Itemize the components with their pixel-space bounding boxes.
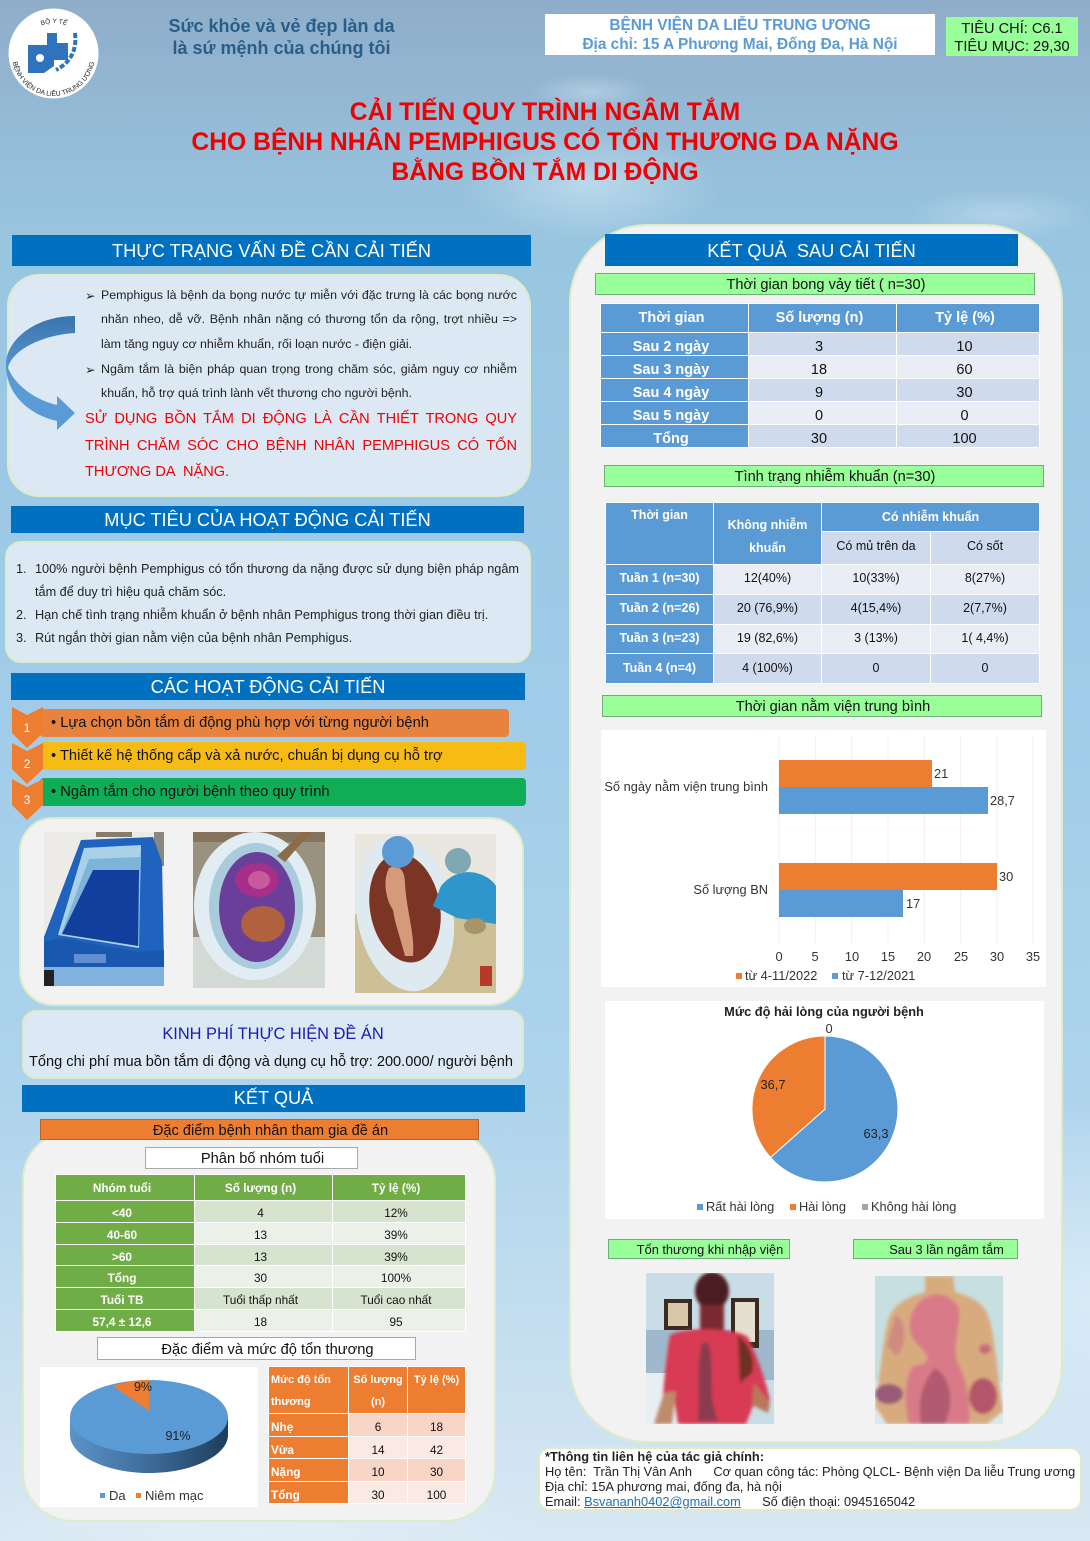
table: nhiễm khuẩn: 20 (76,9%)	[737, 601, 798, 615]
table: mức độ tổn thương: Tổng	[271, 1488, 300, 1502]
table: mức độ tổn thương: 100	[427, 1488, 446, 1502]
text: bullet points	[85, 288, 517, 400]
chart: satisfaction pie	[605, 1001, 1044, 1219]
step 3 bar: • Ngâm tắm cho người bệnh theo quy trình	[51, 784, 330, 800]
table: nhiễm khuẩn: Tuần 3 (n=23)	[620, 631, 700, 645]
table: nhiễm khuẩn: Tuần 1 (n=30)	[620, 571, 700, 585]
table: nhiễm khuẩn: 0	[873, 661, 879, 675]
table: nhóm tuổi: >60	[112, 1250, 132, 1264]
panel: mục tiêu	[5, 541, 531, 663]
table: nhiễm khuẩn: Tuần 4 (n=4)	[623, 661, 696, 675]
table: nhóm tuổi: <40	[112, 1206, 132, 1220]
callout: red conclusion: TRÌNH CHĂM SÓC CHO BỆNH NHÂN PEMPHIGUS CÓ TỔN	[85, 438, 517, 454]
step chevrons 1-3: 2	[24, 757, 31, 771]
table: mức độ tổn thương: 18	[430, 1420, 443, 1434]
table: mức độ tổn thương: Số lượng (n)	[353, 1374, 403, 1408]
table: nhóm tuổi: Tuổi cao nhất	[360, 1293, 432, 1307]
heading: mục tiêu: MỤC TIÊU CỦA HOẠT ĐỘNG CẢI TIẾN	[104, 510, 431, 530]
text: objectives list: 3.	[16, 631, 27, 645]
chart: hospital stay bars: từ 7-12/2021	[842, 968, 915, 983]
chart: hospital stay bars	[601, 730, 1046, 987]
chart: 3D pie lesion site: 9%	[134, 1380, 152, 1394]
table: bong vảy tiết: 0	[815, 408, 823, 424]
step chevrons 1-3	[12, 707, 43, 820]
table: bong vảy tiết: Thời gian	[639, 310, 704, 326]
text: bullet points: nhăn nheo, dễ vỡ. Bệnh nhân nặng có thương tổn da rộng, trợt nhiều =>	[101, 312, 517, 326]
step 2 bar	[40, 742, 526, 770]
step chevrons 1-3: 3	[24, 793, 31, 807]
photo: patient bathing with nurse	[355, 834, 496, 993]
chart: hospital stay bars: Số lượng BN	[693, 882, 768, 897]
subheading: thời gian nằm viện: Thời gian nằm viện trung bình	[736, 699, 930, 715]
slogan: là sứ mệnh của chúng tôi	[172, 38, 391, 58]
chart: 3D pie lesion site	[40, 1367, 258, 1507]
table: bong vảy tiết: Tỷ lệ (%)	[935, 310, 995, 326]
table: bong vảy tiết: Sau 3 ngày	[633, 362, 709, 378]
logo: Bệnh viện Da liễu Trung ương	[8, 8, 98, 98]
table: nhiễm khuẩn: 4 (100%)	[742, 661, 793, 675]
table: mức độ tổn thương: 42	[430, 1443, 443, 1457]
table: bong vảy tiết: 10	[956, 339, 973, 355]
table: nhiễm khuẩn: Có mủ trên da	[836, 538, 916, 552]
chart: hospital stay bars: 5	[811, 949, 819, 964]
chart: satisfaction pie: 36,7	[761, 1077, 785, 1092]
decorative: face mask circle	[382, 836, 414, 868]
table: nhóm tuổi: 13	[254, 1250, 267, 1264]
title: CẢI TIẾN QUY TRÌNH NGÂM TẮM	[350, 99, 740, 126]
heading: kinh phí: KINH PHÍ THỰC HIỆN ĐỀ ÁN	[162, 1025, 384, 1043]
chart: satisfaction pie: Không hài lòng	[871, 1199, 956, 1214]
hospital info box: Địa chỉ: 15 A Phương Mai, Đống Đa, Hà Nội	[582, 36, 898, 52]
table: bong vảy tiết: Sau 4 ngày	[633, 385, 709, 401]
heading: mục tiêu	[11, 506, 524, 533]
step 1 bar	[40, 709, 509, 737]
table: nhóm tuổi: 30	[254, 1271, 267, 1285]
heading: kết quả sau cải tiến	[605, 234, 1018, 266]
text: bullet points: ➢	[85, 289, 95, 303]
step 2 bar: • Thiết kế hệ thống cấp và xả nước, chuẩn bị dụng cụ hỗ trợ	[51, 748, 443, 764]
table: nhóm tuổi: Số lượng (n)	[225, 1180, 296, 1194]
table: nhiễm khuẩn: Thời gian	[631, 508, 688, 522]
table: bong vảy tiết: Số lượng (n)	[776, 310, 863, 326]
chart: hospital stay bars: 21	[934, 766, 948, 781]
table: nhiễm khuẩn	[605, 502, 1040, 684]
chart: 3D pie lesion site: 91%	[165, 1429, 191, 1443]
table: bong vảy tiết: 3	[815, 339, 823, 355]
table: nhiễm khuẩn: 10(33%)	[852, 571, 900, 585]
table: nhóm tuổi: 4	[257, 1206, 264, 1220]
subheading: đặc điểm bệnh nhân	[40, 1119, 479, 1140]
table: nhóm tuổi: 18	[254, 1315, 267, 1329]
panel: thực trạng	[7, 274, 531, 497]
table: mức độ tổn thương: Vừa	[271, 1443, 294, 1457]
callout: red conclusion: SỬ DỤNG BỒN TẮM DI ĐỘNG LÀ CẦN THIẾT TRONG QUY	[85, 411, 517, 427]
logo: Bệnh viện Da liễu Trung ương: BỆNH VIỆN DA LIỄU TRUNG ƯƠNG	[12, 62, 94, 96]
table: mức độ tổn thương: 10	[371, 1465, 385, 1479]
text: objectives list: 1.	[16, 562, 27, 576]
chart: hospital stay bars: 10	[845, 949, 859, 964]
table: nhóm tuổi: Tuổi thấp nhất	[223, 1293, 298, 1307]
callout: red conclusion: THƯƠNG DA NẶNG.	[85, 464, 229, 480]
table: bong vảy tiết: 100	[952, 431, 977, 447]
text: objectives list	[16, 562, 519, 645]
hospital info box	[545, 14, 935, 55]
text: objectives list: 100% người bệnh Pemphigus có tổn thương da nặng được sử dụng biện pháp ngâm	[35, 562, 519, 576]
table: bong vảy tiết: Tổng	[653, 431, 689, 447]
table: nhóm tuổi: 100%	[381, 1271, 411, 1285]
label: tổn thương khi nhập viện: Tổn thương khi nhập viện	[637, 1242, 783, 1256]
table: nhóm tuổi	[55, 1174, 466, 1332]
table: nhiễm khuẩn: Tuần 2 (n=26)	[620, 601, 700, 615]
panel: kinh phí	[22, 1010, 524, 1079]
subheading: phân bố nhóm tuổi	[145, 1147, 358, 1169]
table: nhóm tuổi: 39%	[384, 1250, 408, 1264]
title: BẰNG BỒN TẮM DI ĐỘNG	[391, 159, 699, 186]
table: mức độ tổn thương: Nhẹ	[271, 1420, 293, 1434]
chart: hospital stay bars: 35	[1026, 949, 1040, 964]
subheading: đặc điểm và mức độ tổn thương	[97, 1337, 416, 1360]
photo: inflatable blue tub	[44, 832, 164, 986]
subheading: tình trạng nhiễm khuẩn: Tình trạng nhiễm khuẩn (n=30)	[735, 469, 935, 485]
table: bong vảy tiết: 0	[960, 408, 969, 424]
table: nhóm tuổi: Tuổi TB	[100, 1293, 144, 1307]
table: bong vảy tiết: Sau 5 ngày	[633, 408, 709, 424]
table: bong vảy tiết: 9	[815, 385, 823, 401]
table: mức độ tổn thương: Mức độ tổn thương	[271, 1374, 331, 1408]
table: bong vảy tiết	[600, 303, 1040, 448]
table: nhóm tuổi: 13	[254, 1228, 267, 1242]
chart: satisfaction pie: Mức độ hải lòng của người bệnh	[724, 1004, 924, 1019]
chart: satisfaction pie: Hài lòng	[799, 1199, 846, 1214]
table: bong vảy tiết: 18	[811, 362, 827, 378]
photo: lesions after treatment	[875, 1276, 1003, 1424]
heading: thực trạng	[12, 235, 531, 266]
chart: hospital stay bars: Số ngày nằm viện trung bình	[604, 779, 768, 794]
table: mức độ tổn thương	[268, 1366, 466, 1504]
text: bullet points: Ngâm tắm là biện pháp quan trọng trong chăm sóc, giảm nguy cơ nhiễm	[101, 362, 517, 376]
chart: 3D pie lesion site: Da	[109, 1488, 126, 1503]
heading: kết quả sau cải tiến: KẾT QUẢ SAU CẢI TIẾN	[707, 240, 916, 260]
text: objectives list: Hạn chế tình trạng nhiễm khuẩn ở bệnh nhân Pemphigus trong thời gian điều trị.	[35, 608, 488, 622]
criteria box: TIÊU MỤC: 29,30	[954, 39, 1070, 55]
table: nhiễm khuẩn: 3 (13%)	[854, 631, 898, 645]
subheading: phân bố nhóm tuổi: Phân bố nhóm tuổi	[201, 1151, 324, 1167]
text: bullet points: ➢	[85, 363, 95, 377]
chart: hospital stay bars: 0	[775, 949, 783, 964]
subheading: tình trạng nhiễm khuẩn	[604, 465, 1044, 487]
criteria box: TIÊU CHÍ: C6.1	[961, 21, 1063, 37]
chart: satisfaction pie: 0	[825, 1021, 833, 1036]
table: mức độ tổn thương: 14	[371, 1443, 385, 1457]
text: objectives list: 2.	[16, 608, 27, 622]
table: nhóm tuổi: Nhóm tuổi	[93, 1180, 151, 1194]
step chevrons 1-3: 1	[24, 721, 31, 735]
subheading: đặc điểm và mức độ tổn thương: Đặc điểm và mức độ tổn thương	[161, 1342, 374, 1358]
table: nhiễm khuẩn: 1( 4,4%)	[961, 631, 1009, 645]
heading: các hoạt động: CÁC HOẠT ĐỘNG CẢI TIẾN	[151, 677, 385, 697]
slogan	[168, 16, 395, 58]
chart: hospital stay bars: 17	[906, 896, 920, 911]
chart: hospital stay bars: 30	[990, 949, 1004, 964]
chart: hospital stay bars: 20	[917, 949, 931, 964]
label: tổn thương khi nhập viện	[608, 1239, 790, 1259]
text: bullet points: làm tăng nguy cơ nhiễm khuẩn, rối loạn nước - điện giải.	[101, 337, 412, 351]
table: nhiễm khuẩn: 0	[982, 661, 988, 675]
table: nhóm tuổi: 39%	[384, 1228, 408, 1242]
table: nhiễm khuẩn: Có sốt	[967, 538, 1003, 552]
chart: hospital stay bars: 25	[954, 949, 968, 964]
step 1 bar: • Lựa chọn bồn tắm di động phù hợp với từng người bệnh	[51, 715, 429, 731]
table: bong vảy tiết: 30	[811, 431, 827, 447]
subheading: thời gian nằm viện	[602, 695, 1042, 717]
table: mức độ tổn thương: Tỷ lệ (%)	[414, 1374, 459, 1386]
table: nhiễm khuẩn: Có nhiễm khuẩn	[882, 510, 979, 524]
hospital info box: BỆNH VIỆN DA LIỄU TRUNG ƯƠNG	[609, 17, 871, 34]
panel: kết quả left	[22, 1130, 496, 1522]
subheading: thời gian bong vảy tiết: Thời gian bong vảy tiết ( n=30)	[726, 277, 926, 293]
table: bong vảy tiết: 60	[956, 362, 973, 378]
table: nhiễm khuẩn: 4(15,4%)	[851, 601, 901, 615]
table: nhiễm khuẩn: 2(7,7%)	[963, 601, 1007, 615]
table: bong vảy tiết: Sau 2 ngày	[633, 339, 709, 355]
table: nhiễm khuẩn: 8(27%)	[965, 571, 1005, 585]
chart: hospital stay bars: 28,7	[990, 793, 1015, 808]
icon: curved arrow	[6, 316, 75, 430]
text: objectives list: Rút ngắn thời gian nằm viện của bệnh nhân Pemphigus.	[35, 631, 352, 645]
logo: Bệnh viện Da liễu Trung ương: BỘ Y TẾ	[40, 18, 68, 26]
step 3 bar	[40, 778, 526, 806]
subheading: thời gian bong vảy tiết	[595, 273, 1035, 295]
text: cost: Tổng chi phí mua bồn tắm di động và dụng cụ hỗ trợ: 200.000/ người bệnh	[29, 1054, 513, 1070]
chart: 3D pie lesion site: Niêm mạc	[145, 1488, 204, 1503]
title	[191, 98, 899, 186]
table: nhiễm khuẩn: 19 (82,6%)	[737, 631, 798, 645]
heading: các hoạt động	[11, 673, 525, 700]
heading: kết quả	[22, 1085, 525, 1112]
subheading: đặc điểm bệnh nhân: Đặc điểm bệnh nhân tham gia đề án	[153, 1123, 388, 1139]
panel: contact info: *Thông tin liên hệ của tác giả chính: Họ tên: Trần Thị Vân Anh Cơ quan công tác: Phòng QLCL- Bệnh viện Da liễu Trung ương Địa chỉ: 15A phương mai, đống đa, hà nội Email: Bsvananh0402@gmail.com Số điện thoại: 0945165042	[545, 1449, 1075, 1509]
criteria box	[946, 17, 1078, 56]
text: bullet points: khuẩn, hỗ trợ quá trình lành vết thương cho người bệnh.	[101, 386, 412, 400]
table: bong vảy tiết: 30	[956, 385, 973, 401]
callout: red conclusion	[85, 410, 517, 480]
chart: hospital stay bars: 30	[999, 869, 1013, 884]
table: mức độ tổn thương: 30	[371, 1488, 385, 1502]
title: CHO BỆNH NHÂN PEMPHIGUS CÓ TỔN THƯƠNG DA NẶNG	[191, 129, 899, 156]
slogan: Sức khỏe và vẻ đẹp làn da	[168, 16, 395, 36]
heading: kết quả: KẾT QUẢ	[234, 1088, 313, 1108]
chart: satisfaction pie: Rất hài lòng	[706, 1199, 774, 1214]
heading: thực trạng: THỰC TRẠNG VẤN ĐỀ CẦN CẢI TIẾN	[112, 241, 431, 261]
text: bullet points: Pemphigus là bệnh da bọng nước tự miễn với đặc trưng là các bọng nước	[101, 288, 517, 302]
table: mức độ tổn thương: Nặng	[271, 1465, 300, 1479]
panel: bath photos	[19, 817, 524, 1006]
photo: lesions at admission	[646, 1273, 774, 1424]
chart: hospital stay bars: từ 4-11/2022	[745, 968, 817, 983]
table: nhóm tuổi: 57,4 ± 12,6	[93, 1315, 151, 1329]
label: sau 3 lần ngâm tắm: Sau 3 lần ngâm tắm	[889, 1242, 1004, 1256]
label: sau 3 lần ngâm tắm	[853, 1239, 1018, 1259]
photo: tub filled with herbal water	[193, 832, 325, 988]
panel: kết quả sau cải tiến	[569, 224, 1063, 1443]
table: mức độ tổn thương: 6	[375, 1420, 381, 1434]
table: nhóm tuổi: 40-60	[107, 1228, 137, 1242]
table: nhóm tuổi: 12%	[384, 1206, 408, 1220]
table: nhiễm khuẩn: Không nhiễm khuẩn	[728, 518, 807, 554]
table: mức độ tổn thương: 30	[430, 1465, 443, 1479]
table: nhóm tuổi: Tổng	[108, 1271, 136, 1285]
chart: satisfaction pie: 63,3	[864, 1126, 888, 1141]
text: objectives list: tắm để duy trì hiệu quả chăm sóc.	[35, 585, 226, 599]
chart: hospital stay bars: 15	[881, 949, 895, 964]
table: nhóm tuổi: 95	[389, 1315, 403, 1329]
table: nhiễm khuẩn: 12(40%)	[744, 571, 791, 585]
table: nhóm tuổi: Tỷ lệ (%)	[372, 1180, 420, 1194]
